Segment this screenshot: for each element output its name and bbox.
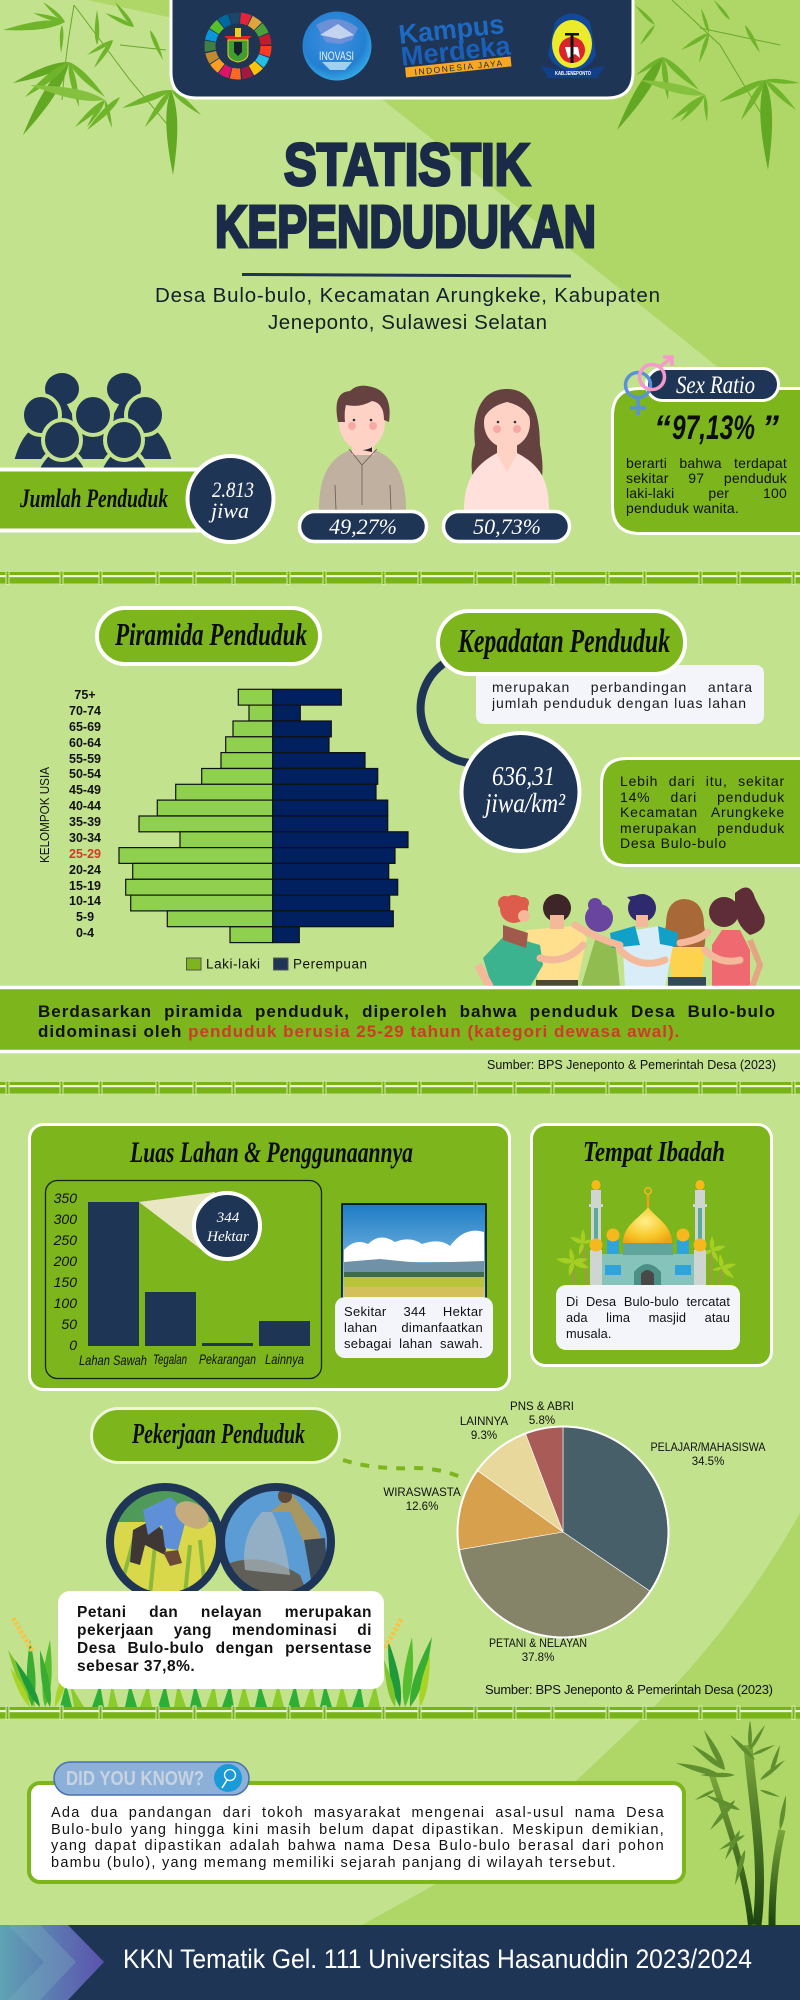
age labels: 10-14 bbox=[69, 894, 101, 908]
text box: mosque note: ada lima masjid atau bbox=[566, 1310, 730, 1325]
logo: kampus merdeka: INDONESIA JAYA bbox=[414, 58, 503, 77]
label: female percentage: 50,73% bbox=[473, 514, 541, 539]
photo: farmer bbox=[110, 1487, 220, 1597]
pill: sex ratio heading bbox=[646, 368, 778, 400]
towers bbox=[607, 1240, 619, 1256]
bar chart: 0 bbox=[69, 1337, 77, 1353]
divider: bamboo 3 bbox=[0, 1706, 800, 1720]
label: male percentage bbox=[300, 512, 426, 542]
text: did you know body: Ada dua pandangan dari tokoh masyarakat mengenai asal-usul nama Desa bbox=[51, 1805, 665, 1821]
axis title: KELOMPOK USIA bbox=[38, 766, 52, 863]
heading: piramida penduduk: Piramida Penduduk bbox=[114, 616, 307, 652]
legend: Laki-laki bbox=[206, 956, 260, 972]
illustration: mosque bbox=[555, 1180, 737, 1285]
title bbox=[215, 132, 596, 260]
age labels: 0-4 bbox=[76, 926, 94, 940]
pie labels: 5.8% bbox=[529, 1415, 555, 1427]
text: sex ratio explanation: sekitar 97 penduduk bbox=[626, 470, 787, 486]
dashed connector bbox=[343, 1460, 463, 1478]
person 1 bbox=[478, 895, 543, 987]
header bar with logos bbox=[171, 0, 633, 98]
subtitle: Desa Bulo-bulo, Kecamatan Arungkeke, Kabupaten bbox=[155, 284, 660, 307]
panel: sex ratio bbox=[612, 357, 800, 534]
palms bbox=[555, 1229, 737, 1285]
heading: Luas Lahan & Penggunaannya bbox=[129, 1136, 413, 1169]
age labels: 65-69 bbox=[69, 720, 101, 734]
pill: sex ratio heading: Sex Ratio bbox=[676, 372, 755, 399]
callout: 344 hektar bbox=[194, 1193, 260, 1259]
panel: density note: merupakan penduduk bbox=[620, 820, 785, 836]
text box: land note bbox=[335, 1297, 493, 1358]
text card: occupations: Petani dan nelayan merupakan bbox=[77, 1604, 372, 1621]
band: pyramid conclusion bbox=[0, 988, 800, 1052]
logo: inovasi globe bbox=[302, 12, 372, 80]
circle: population bbox=[188, 456, 274, 542]
age labels: 55-59 bbox=[69, 752, 101, 766]
bar chart: 250 bbox=[53, 1232, 77, 1248]
text card: occupations: sebesar 37,8%. bbox=[77, 1658, 195, 1675]
pie labels: PETANI & NELAYAN bbox=[489, 1638, 587, 1650]
panel: density note: 14% dari penduduk bbox=[620, 788, 785, 804]
source note 2: Sumber: BPS Jeneponto & Pemerintah Desa (2023) bbox=[485, 1682, 773, 1697]
bar chart: 300 bbox=[54, 1211, 77, 1227]
bar chart: 100 bbox=[54, 1295, 77, 1311]
source note 1: Sumber: BPS Jeneponto & Pemerintah Desa (2023) bbox=[487, 1058, 776, 1072]
text box: mosque note bbox=[556, 1285, 740, 1350]
logo: SDG wheel bbox=[198, 6, 278, 86]
text box: land note: lahan dimanfaatkan bbox=[344, 1320, 483, 1335]
logo: kabupaten jeneponto: KAB.JENEPONTO bbox=[555, 71, 591, 77]
bar chart: 200 bbox=[53, 1253, 77, 1269]
bamboo leaves: top left bbox=[2, 1, 203, 175]
pie labels: LAINNYA bbox=[460, 1416, 509, 1428]
circle: density value: 636,31 bbox=[492, 761, 555, 791]
illustration: bamboo plant bbox=[675, 1720, 788, 1925]
text box: density definition bbox=[476, 665, 764, 724]
pie labels: 37.8% bbox=[522, 1652, 554, 1664]
heading: pekerjaan penduduk: Pekerjaan Penduduk bbox=[131, 1419, 305, 1450]
icon: magnifier bbox=[214, 1764, 242, 1792]
chevrons bbox=[0, 1925, 104, 2000]
pie labels: 34.5% bbox=[692, 1456, 724, 1468]
text: did you know body bbox=[51, 1805, 665, 1875]
minarets bbox=[589, 1190, 707, 1250]
circle: population: jiwa bbox=[208, 498, 249, 523]
panel: tempat ibadah bbox=[532, 1124, 772, 1366]
person 6 bbox=[709, 888, 765, 987]
pie labels bbox=[383, 1401, 766, 1664]
statistic: sex ratio value: 97,13% bbox=[672, 409, 755, 447]
panel: density note bbox=[602, 758, 800, 866]
subtitle bbox=[155, 284, 660, 334]
statistic: sex ratio value: “ bbox=[654, 409, 671, 447]
footer bbox=[0, 1925, 800, 2000]
icon: woman figure bbox=[464, 389, 549, 510]
circle: density value bbox=[462, 733, 580, 851]
text: sex ratio explanation: laki-laki per 100 bbox=[626, 485, 787, 501]
chart: occupation pie bbox=[383, 1401, 766, 1664]
age labels: 25-29 bbox=[69, 847, 101, 861]
text: sex ratio explanation bbox=[626, 456, 787, 520]
pie labels: WIRASWASTA bbox=[383, 1487, 461, 1499]
arc connector bbox=[421, 664, 470, 763]
bar chart: Lahan Sawah bbox=[79, 1352, 147, 1368]
bar chart: 350 bbox=[54, 1190, 77, 1206]
logo: kabupaten jeneponto bbox=[541, 14, 605, 78]
bar chart: 50 bbox=[61, 1316, 77, 1332]
circle: density value: jiwa/km² bbox=[482, 788, 566, 818]
bar chart: Pekarangan bbox=[199, 1351, 256, 1367]
bamboo leaves: top right bbox=[612, 0, 800, 170]
door and windows bbox=[634, 1264, 661, 1285]
icon: gender symbols bbox=[626, 357, 672, 415]
text card: occupations bbox=[58, 1591, 384, 1689]
age labels: 45-49 bbox=[69, 783, 101, 797]
pie labels: PNS & ABRI bbox=[510, 1401, 574, 1413]
panel: density note: Desa Bulo-bulo bbox=[620, 835, 727, 851]
logo: kampus merdeka: Kampus bbox=[397, 9, 506, 50]
heading: kepadatan penduduk: Kepadatan Penduduk bbox=[457, 623, 670, 660]
callout: 344 hektar: 344 bbox=[216, 1210, 240, 1226]
statistic: sex ratio value: ” bbox=[762, 409, 779, 447]
panel: density note: Kecamatan Arungkeke bbox=[620, 804, 785, 820]
age labels: 40-44 bbox=[69, 799, 101, 813]
logo: university emblem bbox=[224, 28, 252, 62]
title: STATISTIK bbox=[284, 132, 530, 198]
bar chart: Lainnya bbox=[265, 1351, 304, 1367]
heading: pekerjaan penduduk bbox=[92, 1408, 340, 1462]
badge: did you know: DID YOU KNOW? bbox=[66, 1768, 204, 1790]
age labels: 60-64 bbox=[69, 736, 101, 750]
logo: inovasi globe: INOVASI bbox=[319, 49, 354, 63]
linked arms bbox=[540, 925, 740, 963]
title: KEPENDUDUKAN bbox=[215, 194, 596, 260]
illustration: group of friends bbox=[478, 888, 765, 987]
text box: mosque note: Di Desa Bulo-bulo tercatat bbox=[566, 1294, 730, 1309]
person 3 bbox=[581, 898, 620, 987]
bar chart bbox=[46, 1180, 322, 1378]
pie labels: PELAJAR/MAHASISWA bbox=[650, 1442, 766, 1454]
rice grass decoration bbox=[4, 1618, 436, 1709]
legend: Perempuan bbox=[293, 956, 367, 972]
text box: mosque note: musala. bbox=[566, 1326, 612, 1341]
circle: population: 2.813 bbox=[212, 477, 254, 502]
age labels: 30-34 bbox=[69, 831, 101, 845]
icon: man figure bbox=[319, 386, 406, 510]
person 5 bbox=[663, 899, 706, 987]
dome bbox=[623, 1207, 672, 1243]
photo: fisherman bbox=[220, 1487, 332, 1600]
badge: did you know bbox=[54, 1762, 249, 1795]
label: male percentage: 49,27% bbox=[329, 514, 397, 539]
text: did you know body: bambu (bulo), yang memang memiliki sejarah panjang di wilayah tersebut. bbox=[51, 1855, 617, 1871]
heading: kepadatan penduduk bbox=[438, 611, 685, 674]
band: pyramid conclusion: Berdasarkan piramida penduduk, diperoleh bahwa penduduk Desa Bulo-bulo bbox=[38, 1002, 776, 1021]
person 4 bbox=[610, 894, 678, 987]
age labels: 50-54 bbox=[69, 767, 101, 781]
text box: land note: sebagai lahan sawah. bbox=[344, 1336, 483, 1351]
legend bbox=[186, 956, 367, 972]
heading: piramida penduduk bbox=[97, 608, 320, 664]
text box: land note: Sekitar 344 Hektar bbox=[344, 1304, 483, 1319]
pie labels: 9.3% bbox=[471, 1430, 497, 1442]
heading: Tempat Ibadah bbox=[583, 1136, 725, 1168]
logo: kampus merdeka bbox=[397, 9, 514, 78]
photo: rice field bbox=[342, 1204, 486, 1298]
panel: luas lahan bbox=[30, 1124, 510, 1390]
age labels: 35-39 bbox=[69, 815, 101, 829]
band: pyramid conclusion: didominasi oleh penduduk berusia 25-29 tahun (kategori dewasa awal). bbox=[38, 1022, 680, 1041]
panel: did you know bbox=[29, 1762, 684, 1882]
text: did you know body: Bulo-bulo yang hingga kini masih belum dapat dipastikan. Meskipun demikian, bbox=[51, 1822, 665, 1838]
text card: occupations: pekerjaan yang mendominasi di bbox=[77, 1622, 372, 1639]
male bars bbox=[119, 689, 273, 943]
age labels: 5-9 bbox=[76, 910, 94, 924]
callout: 344 hektar: Hektar bbox=[206, 1229, 249, 1245]
icon: crowd of people bbox=[12, 373, 174, 470]
text: sex ratio explanation: penduduk wanita. bbox=[626, 500, 739, 516]
age labels: 20-24 bbox=[69, 863, 101, 877]
chart: population pyramid bbox=[38, 688, 408, 972]
divider: bamboo 1 bbox=[0, 571, 800, 584]
divider: bamboo 2 bbox=[0, 1081, 800, 1094]
text card: occupations: Desa Bulo-bulo dengan persentase bbox=[77, 1640, 372, 1657]
label: female percentage bbox=[444, 512, 570, 542]
age labels: 15-19 bbox=[69, 879, 101, 893]
subtitle: Jeneponto, Sulawesi Selatan bbox=[268, 311, 547, 334]
panel: jumlah penduduk bbox=[0, 456, 274, 542]
age labels: 75+ bbox=[74, 688, 96, 702]
bar chart: Tegalan bbox=[153, 1351, 187, 1367]
age labels: 70-74 bbox=[69, 704, 101, 718]
text box: density definition: jumlah penduduk dengan luas lahan bbox=[492, 694, 747, 710]
age labels bbox=[69, 688, 101, 940]
main building bbox=[590, 1254, 706, 1285]
callout fan bbox=[139, 1192, 215, 1254]
pie labels: 12.6% bbox=[406, 1501, 438, 1513]
female bars bbox=[273, 689, 408, 943]
person 2 bbox=[526, 894, 587, 987]
footer text: KKN Tematik Gel. 111 Universitas Hasanuddin 2023/2024 bbox=[123, 1944, 752, 1974]
logo: kampus merdeka: Merdeka bbox=[399, 30, 513, 72]
text: did you know body: yang dapat dipastikan adalah bahwa nama Desa Bulo-bulo berasal dari pohon bbox=[51, 1838, 665, 1854]
bar chart: 150 bbox=[54, 1274, 77, 1290]
panel: jumlah penduduk: Jumlah Penduduk bbox=[19, 484, 168, 513]
